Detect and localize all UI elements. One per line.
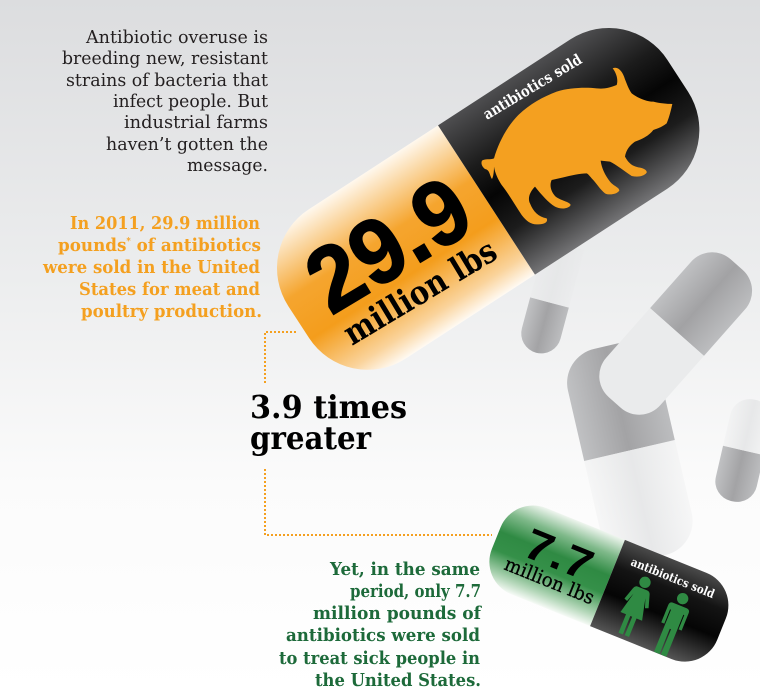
grey pill: small under large capsule — [517, 239, 584, 358]
text block: green — [279, 559, 482, 691]
number: 7.7: 7.7 — [517, 520, 600, 590]
capsule black half — [438, 1, 726, 275]
grey pill: diagonal upper right — [588, 241, 760, 426]
text block: orange 2011: In 2011, 29.9 million — [70, 213, 260, 234]
text block: green: period, only 7.7 — [350, 581, 481, 602]
heading: 3.9 times greater — [250, 388, 407, 457]
text block: intro: strains of bacteria that — [66, 70, 269, 91]
text block: green: to treat sick people in — [279, 648, 480, 669]
text block: intro: industrial farms — [124, 112, 268, 133]
text block: intro — [62, 27, 269, 176]
number: 29.9: 29.9 — [289, 157, 489, 333]
text block: orange 2011: pounds — [58, 235, 132, 256]
heading: 3.9 times greater: 3.9 times — [250, 388, 407, 426]
capsule black half — [590, 540, 739, 672]
text block: orange 2011: were sold in the United — [42, 257, 260, 278]
capsule orange half — [250, 125, 535, 397]
text block: orange 2011: States for meat and — [79, 279, 260, 300]
icon: pig — [481, 68, 672, 224]
text block: orange 2011: poultry production. — [81, 301, 262, 322]
text block: intro: message. — [187, 155, 268, 176]
label: antibiotics sold: antibiotics sold — [629, 555, 717, 601]
heading: 3.9 times greater: greater — [250, 419, 372, 457]
text block: intro: haven’t gotten the — [106, 134, 268, 155]
text block: intro: breeding new, resistant — [62, 48, 269, 69]
text block: green: the United States. — [315, 670, 481, 691]
text block: orange 2011: of antibiotics — [131, 235, 261, 256]
text block: intro: Antibiotic overuse is — [85, 27, 268, 48]
grey pill: tall lower centre — [560, 336, 700, 568]
grey pill: small at right edge — [711, 395, 760, 506]
label: antibiotics sold: antibiotics sold — [480, 50, 585, 123]
text block: green: Yet, in the same — [329, 559, 480, 580]
connector: dotted bracket — [265, 332, 492, 535]
label: million lbs: million lbs — [501, 553, 597, 609]
large capsule: 29.9 million lbs — [250, 1, 726, 397]
icon: man — [650, 593, 690, 658]
icon: woman — [612, 577, 655, 640]
text block: intro: infect people. But — [113, 91, 269, 112]
text block: green: antibiotics were sold — [286, 625, 480, 646]
text block: orange 2011: * — [126, 237, 131, 247]
text block: green: million pounds of — [313, 603, 482, 624]
label: million lbs: million lbs — [336, 231, 504, 353]
text block: orange 2011 — [42, 213, 262, 322]
capsule green half — [479, 495, 625, 626]
small capsule: 7.7 million lbs — [479, 495, 739, 672]
